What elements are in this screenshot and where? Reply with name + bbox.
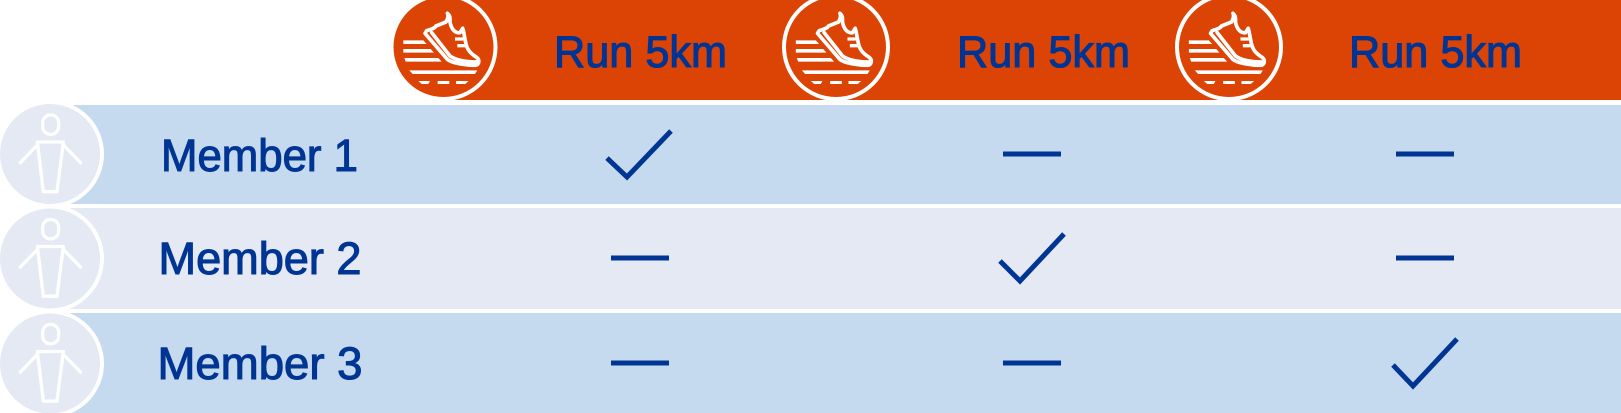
column heading 2: Run 5km <box>957 28 1130 77</box>
dash <box>1003 360 1061 366</box>
icon: running shoe 3 <box>1177 0 1281 99</box>
icon: person 3 <box>0 310 104 413</box>
check mark <box>1393 339 1457 386</box>
dash <box>1396 152 1454 156</box>
row: Member 1 <box>0 100 1621 208</box>
label: Member 3: Member 3 <box>158 338 362 389</box>
dash <box>611 256 669 260</box>
icon: running shoe 1 <box>392 0 496 99</box>
row: Member 2 <box>0 204 1621 312</box>
icon: person 1 <box>0 100 104 208</box>
dash <box>611 360 669 366</box>
dash <box>1396 256 1454 260</box>
dash <box>1003 152 1061 156</box>
check mark <box>607 131 671 177</box>
icon: running shoe 2 <box>784 0 888 99</box>
row: Member 3 <box>0 310 1621 413</box>
header band <box>450 0 1621 100</box>
icon: person 2 <box>0 204 104 312</box>
column heading 1: Run 5km <box>554 28 727 77</box>
check mark <box>1000 234 1064 281</box>
column heading 3: Run 5km <box>1349 28 1522 77</box>
label: Member 1: Member 1 <box>161 130 358 181</box>
label: Member 2: Member 2 <box>158 233 362 284</box>
